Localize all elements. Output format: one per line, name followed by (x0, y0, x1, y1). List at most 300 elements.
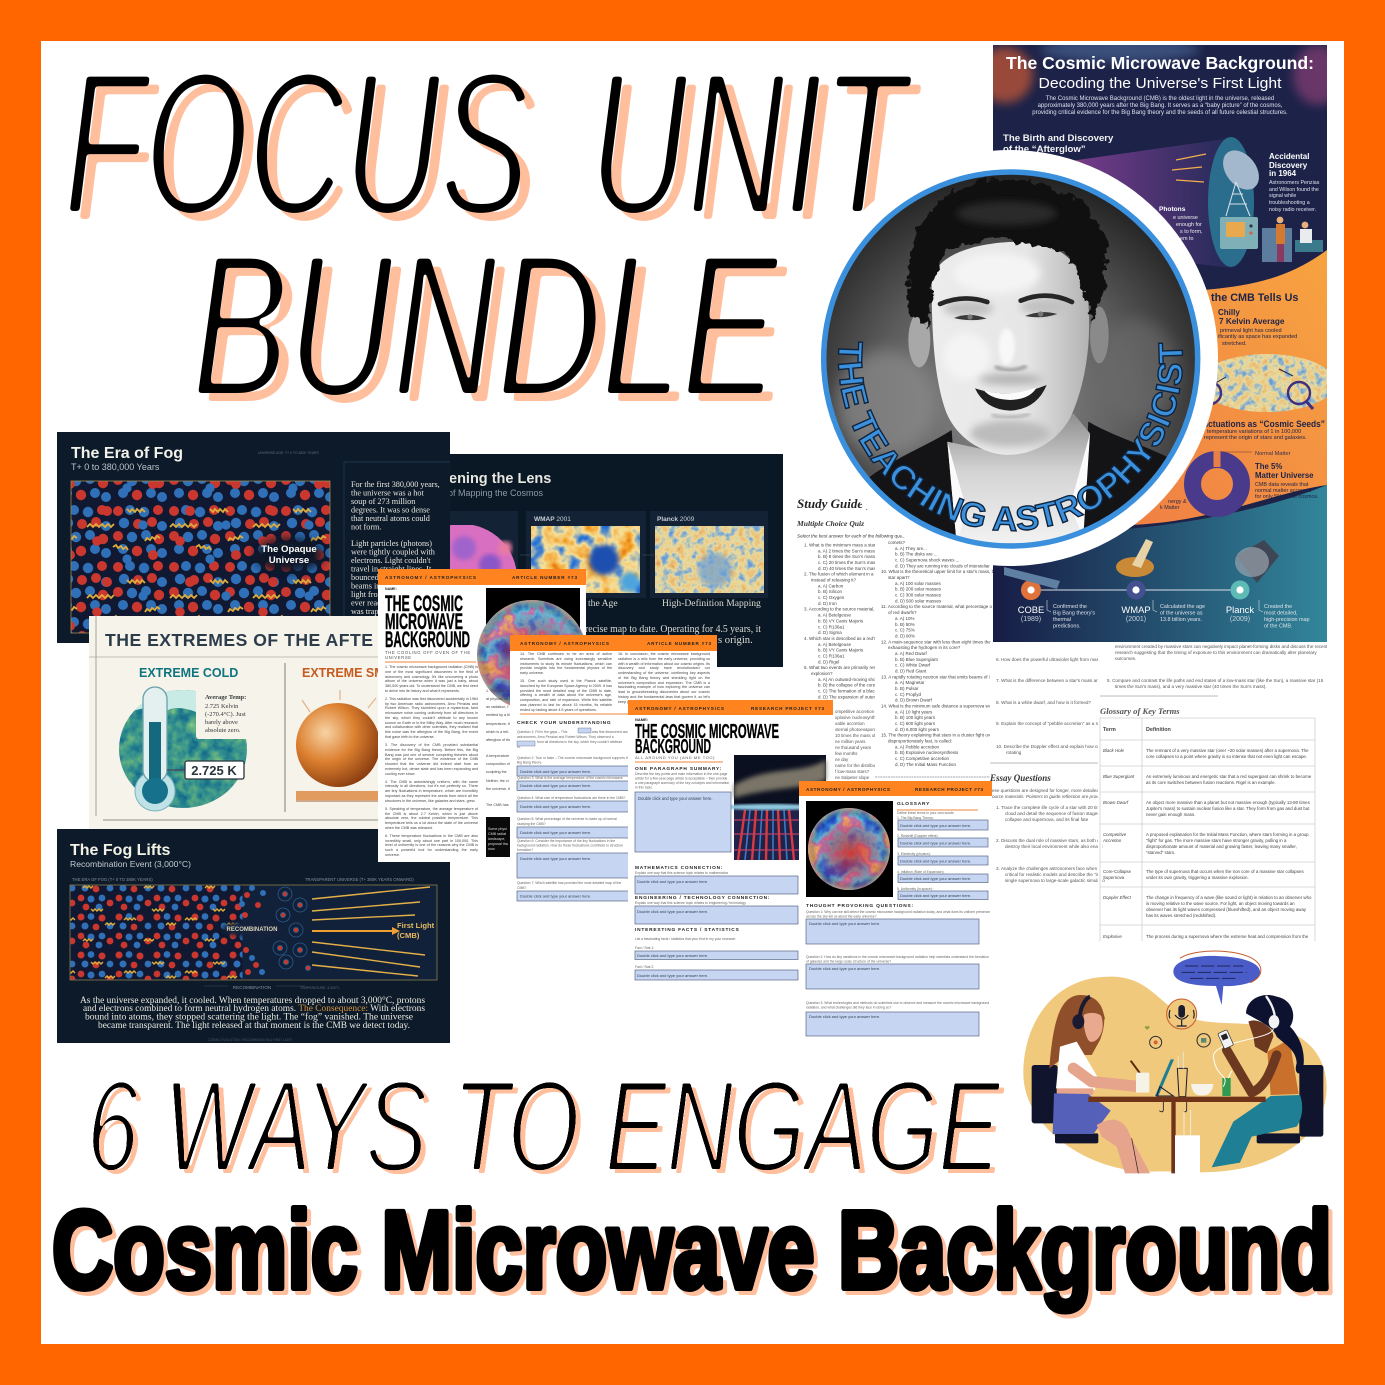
teal timeline band (993, 485, 1327, 642)
poster title: The Cosmic Microwave Background (CMB) is the oldest light in the universe, released (1046, 96, 1274, 102)
panel: Sharpening the Lens slide: of Mapping the Cosmos (450, 488, 544, 498)
table (1088, 1097, 1266, 1173)
diagram: recombination: First Light (397, 921, 435, 930)
quiz column two: 11. According to the source material, what percentage o (881, 604, 992, 609)
panel: research project page one: Double click and type your answer here. (637, 953, 708, 958)
essay and short answer text: 9. Explain the concept of “pebble accretion” as a n (996, 721, 1099, 726)
what the CMB tells us text: stretched. (1222, 341, 1247, 347)
heading: THE COSMIC (385, 591, 463, 616)
text block: fog lifts explanation: As the universe expanded, it cooled. When temperatures dropped to about 3,000°C, protons (80, 995, 425, 1006)
what the CMB tells us text: 7 Kelvin Average (1219, 317, 1285, 326)
badge lettering: THE TEACHING ASTROPHYSICIST (838, 341, 1184, 532)
quiz column two: d. D) 6,000 light years (895, 727, 940, 732)
text block: era of fog explanation: soup of 273 million (351, 497, 415, 506)
panel: research project page two: Double click and type your answer here. (900, 858, 971, 864)
quiz column two: comets? (888, 540, 906, 545)
quiz column two: a. A) They are... (895, 546, 927, 551)
callout: dark fact box: proposal tha (488, 842, 508, 846)
map: CMB seeds with magnifiers (1212, 354, 1327, 412)
quiz column two: c. C) White Dwarf (895, 663, 931, 668)
section labels: ENGINEERING / TECHNOLOGY CONNECTION: (635, 895, 770, 901)
article side column: emitted by a bl (486, 713, 510, 717)
text block: era of fog explanation: travel in straight lines. It (351, 564, 432, 574)
quiz column one: 1. What is the minimum mass a star (804, 542, 876, 548)
image: galaxy and grid (720, 755, 826, 860)
panel: Study Guide quiz: few months (835, 751, 858, 756)
panel: Study Guide quiz: xternal photoevaporat (835, 727, 878, 732)
timeline: COBE WMAP Planck missions: Calculated the age (1160, 604, 1205, 610)
heading (635, 721, 779, 758)
article text: 2. This radiation was first discovered accidentally in 1964 by two American radio astronomers, Arno Penzias and Robert Wilson. They stumbled upon a mysterious, faint microwave noise coming uniformly from all directions in the sky, which they couldn't attribute to any known source on Earth or in the Milky Way. After much research and collaboration with other scientists, they realized that this noise was the afterglow of the Big Bang, the event that gave birth to the universe. (385, 697, 478, 739)
glossary boxes: 2. Redshift (Doppler effect): (897, 834, 938, 838)
quiz column one: a. A) 2 times the Sun's mass (818, 548, 876, 553)
panel: research project page one: Double click and type your answer here. (637, 879, 708, 884)
questions: Question 1: Fill in the gaps – This (517, 730, 568, 734)
text block: accidental discovery: and Wilson found the (1269, 187, 1319, 193)
glossary table: under its own gravity, triggering a massive explosion. (1146, 875, 1249, 880)
heading: BACKGROUND (635, 736, 711, 758)
article side column: The CMB has (486, 803, 509, 807)
essay and short answer text: ource materials. Pointers to guide reflection are provid (992, 794, 1102, 799)
text block: era of fog explanation: was trapped. (351, 607, 392, 616)
title: Focus Unit Bundle: FOCUS (74, 41, 539, 266)
image: opaque universe particles: Universe (269, 555, 309, 566)
quiz column one: a. A) Carbon (818, 583, 844, 588)
panel: research project page two: GLOSSARY (897, 801, 930, 807)
text block: average temp: Average Temp: (205, 694, 246, 701)
quiz column one: d. D) 40 times the Sun's mass (818, 566, 879, 571)
panel: The Extremes of the Afterglow slide: THE EXTREMES OF THE AFTE (105, 630, 373, 650)
questions: astronomers, Arno Penzias and Robert Wilson. They observed a (517, 735, 614, 739)
quiz column two: b. B) Blue Supergiant (895, 657, 939, 662)
glossary table: is moving relative to the wave source. For light, an object moving towards an (1146, 901, 1295, 906)
timeline: COBE WMAP Planck missions: Planck (1226, 604, 1254, 615)
thought provoking questions: Double click and type your answer here. (809, 966, 880, 971)
quiz column one: 5. What two events are primarily res (804, 665, 877, 670)
thought provoking questions: across the sky tell us about the early universe? (806, 914, 877, 918)
glossary table: Black Hole (1103, 748, 1125, 753)
thought provoking questions: Double click and type your answer here. (809, 1014, 880, 1019)
essay and short answer text: 10. Describe the Doppler effect and explain how col (996, 744, 1101, 749)
quiz column one: b. B) the collapse of the core (818, 683, 876, 688)
quiz column two: a. A) Magnetar (895, 680, 925, 685)
essay and short answer text: collapse and supernova, and its final fate (1005, 817, 1089, 822)
quiz column two: a. A) 100 solar masses (895, 581, 942, 586)
map: COBE (407, 511, 518, 632)
panel: article page one: NAME: (385, 587, 397, 591)
panel: Sharpening the Lens slide (450, 454, 783, 667)
text block: average temp (205, 694, 246, 734)
thought provoking questions: Question 1: Why can we still detect the cosmic microwave background radiation today, and what does its uniform presence (806, 910, 990, 914)
questions: CMB? (517, 886, 527, 890)
callout: dark fact box: landscape, (488, 837, 505, 841)
essay and short answer text: single supernova to large-scale galactic simulatio (1005, 878, 1105, 883)
glossary table: Accretion (1102, 838, 1122, 843)
glossary table: “starved” stars. (1146, 850, 1175, 855)
quiz column one: 3. According to the source material, (804, 607, 875, 612)
poster title (1006, 53, 1314, 116)
panel: Study Guide quiz (796, 496, 993, 786)
image: rainbow cosmic sphere (477, 588, 587, 710)
panel: CMB infographic poster: Photons (1159, 206, 1186, 213)
chart: matter donut: k Matter (1160, 505, 1180, 511)
diagram: recombination: RECOMBINATION (227, 927, 277, 933)
panel: research project page two: Double click and type your answer here. (900, 840, 971, 846)
panel: research project page one: ALL AROUND YOU (AND ME TOO) (635, 755, 715, 760)
panel: research project page two: Define these terms in your own words (897, 811, 954, 815)
what the CMB tells us text: primeval light has cooled (1220, 328, 1282, 334)
article side column: Neither, the cl (486, 779, 509, 783)
panel: research project page one: NAME: (635, 717, 648, 722)
glossary table: A proposed explanation for the Initial Mass Function, where stars forming in a group (1146, 832, 1309, 837)
quiz column two: of red dwarfs? (888, 610, 917, 615)
text block: era of fog explanation: bounced around like (351, 573, 418, 582)
text block: era of fog explanation (351, 480, 440, 616)
panel: research project page two: Double click and type your answer here. (900, 893, 971, 898)
panel: article page two: CHECK YOUR UNDERSTANDING (517, 720, 611, 726)
timeline: COBE WMAP Planck missions: (2009) (1230, 616, 1250, 623)
quiz column one: d. D) Iron (818, 601, 837, 606)
panel: article page one: ARTICLE NUMBER #73 (512, 575, 577, 580)
quiz column one: a. A) An outward-moving shc (818, 677, 876, 682)
timeline: COBE WMAP Planck missions: (2001) (1126, 616, 1146, 623)
questions: to. (517, 745, 521, 749)
timeline: COBE WMAP Planck missions: 13.8 billion years. (1160, 617, 1202, 623)
text block: era of fog explanation: that neutral atoms could (351, 514, 430, 523)
answer boxes (635, 792, 798, 980)
questions: Question 6: Consider the importance of the tiny fluctuations in the (517, 839, 615, 843)
text block: essay continuation: 5. Compare and contrast the life paths and end states of a low-mass star (like the Sun), a massive star (15 (1107, 678, 1324, 683)
thought provoking questions: radiation, and what challenges did they face in doing so? (806, 1006, 891, 1010)
text block: accidental discovery: troubleshooting a (1269, 200, 1310, 206)
panel: The Fog Lifts slide (57, 829, 450, 1043)
map: Planck: Planck 2009 (657, 516, 695, 523)
quiz column one: d. D) Rigel (818, 659, 839, 664)
article text columns: 14. The CMB continues to be an area of active research. Scientists are using increasingly sensitive instruments to study its minute fluctuations, which can provide insights into the fundamental physics of the early universe. (520, 652, 612, 675)
article side column: sculpting the (486, 770, 507, 774)
captions: High-Definition Mapping (662, 598, 761, 609)
quiz column two: a. A) Red Dwarf (895, 651, 928, 656)
panel: article page two: Double click and type your answer here. (520, 830, 591, 835)
panel: CMB infographic poster: s to form, (1180, 229, 1203, 235)
quiz column one: c. C) 20 times the Sun's mass (818, 560, 878, 565)
glossary table: Jupiter's mass) to sustain nuclear fusion like a star. They form from gas and dust but (1146, 806, 1310, 811)
questions: formation? (517, 848, 533, 852)
quiz column two: d. D) 500 solar masses (895, 598, 942, 603)
questions: from all directions in the sky, which they couldn't attribute (537, 740, 622, 744)
quiz column two: d. D) Brown Dwarf (895, 698, 933, 703)
timeline: COBE WMAP Planck missions: of the CMB. (1264, 624, 1292, 630)
quiz column two: 14. What is the minimum safe distance a supernova wo (881, 704, 992, 709)
text block: essay continuation (1107, 644, 1328, 689)
chart: matter donut: Normal Matter (1255, 451, 1291, 457)
text block: essay continuation: research suggesting that the timing of exposure to this environment can dramatically alter planetary (1115, 650, 1317, 655)
quiz column one: 2. The fusion of which element in a st (804, 572, 879, 577)
panel: CMB infographic poster: e universe (1173, 215, 1198, 221)
panel: Study Guide quiz: xplosive nucleosynthe (835, 715, 879, 720)
text block: accidental discovery: in 1964 (1269, 169, 1297, 178)
quiz column two: d. D) Red Giant (895, 668, 927, 673)
quiz column two: c. C) Supernova shock waves ... (895, 558, 960, 563)
panel: article page one: THE COOLING OFF OVEN OF THE (385, 650, 471, 655)
panel: The Fog Lifts slide: RECOMBINATION (233, 985, 271, 990)
essay and short answer text: 3. Analyze the challenges astronomers face when (996, 866, 1098, 871)
quiz column one: c. C) R136a1 (818, 653, 845, 658)
glossary table: Term (1103, 727, 1116, 733)
text block: fog lifts explanation: bound into atoms, they stopped scattering the light. The “fog” vanished. The universe (85, 1012, 413, 1022)
panel: essay questions and glossary page: Glossary of Key Terms (1100, 706, 1180, 716)
heading: BACKGROUND (385, 627, 470, 652)
panel: article page two: Double click and type your answer here. (520, 769, 591, 774)
section labels: INTERESTING FACTS / STATISTICS (635, 927, 740, 933)
glossary table: core collapses to a point where gravity is so intense that not even light can escape. (1146, 754, 1307, 759)
character: left listener (1032, 995, 1150, 1173)
what the CMB tells us text: Chilly (1218, 308, 1240, 317)
panel: article page one: ASTRONOMY / ASTROPHYSICS (385, 575, 476, 580)
quiz column two: b. B) Pulsar (895, 686, 919, 691)
glossary table: Core-Collapse (1103, 869, 1132, 874)
what the CMB tells us text: ificantly as space has expanded (1218, 334, 1297, 340)
title: Focus Unit Bundle (64, 41, 923, 421)
essay and short answer text: 8. What is a white dwarf, and how is it formed? (996, 700, 1091, 705)
timeline: COBE WMAP Planck missions: Big Bang theory's (1053, 610, 1095, 616)
quiz column one: instead of releasing it? (811, 578, 857, 583)
glossary boxes: 5. Uniformity (in space): (897, 887, 933, 891)
panel: research project page two: RESEARCH PROJECT #73 (915, 787, 983, 792)
panel: The Fog Lifts slide: Recombination Event (3,000°C) (70, 859, 191, 869)
text block: accidental discovery (1269, 152, 1320, 213)
glossary table: An extremely luminous and energetic star that a red supergiant can shrink to become (1146, 774, 1312, 779)
map: WMAP: WMAP 2001 (534, 516, 571, 523)
panel: Study Guide quiz: Study Guide , (797, 496, 870, 511)
section labels: MATHEMATICS CONNECTION: (635, 865, 723, 871)
quiz column one: c. C) R136a1 (818, 624, 845, 629)
essay and short answer text: 1. Trace the complete life cycle of a star with 20 tim (996, 805, 1100, 810)
panel: CMB infographic poster (993, 45, 1327, 642)
panel: research project page one: Double click and type your answer here. (637, 909, 708, 914)
text block: era of fog explanation: beams in a dense fog. No (351, 582, 434, 590)
panel: research project page one: in this topic. (635, 786, 653, 790)
glossary table (1100, 718, 1315, 942)
panel: Study Guide quiz: ne Salpeter slope (835, 775, 870, 780)
tabletop: cup, tablet, bowl and can (1131, 1052, 1232, 1097)
text block: average temp: barely above (205, 719, 238, 726)
quiz column one: b. B) VY Canis Majoris (818, 618, 864, 623)
what the CMB tells us text: the CMB Tells Us (1211, 292, 1298, 304)
text block: era of fog explanation: were tightly coupled with (351, 548, 435, 556)
quiz column two: c. C) Competitive accretion (895, 756, 950, 761)
diagram: recombination: (CMB) (397, 931, 420, 940)
speech bubble (1173, 951, 1261, 1005)
panel: The Fog Lifts slide: TEMPERATURE: 3,000°C (300, 986, 340, 990)
text block: fog lifts explanation: became transparent. The light released at that moment is the CMB we detect today. (98, 1020, 410, 1031)
text block: average temp: (-270.4°C). Just (205, 711, 246, 718)
glossary table: Brown Dwarf (1103, 800, 1129, 805)
panel: research project page two: ASTRONOMY / ASTROPHYSICS (806, 787, 890, 792)
quiz column one: d. D) The expansion of outer (818, 694, 875, 699)
captions (585, 598, 761, 646)
text block: accidental discovery: signal while (1269, 193, 1296, 199)
callout: 2.725 K (167, 761, 244, 779)
answer boxes (517, 766, 637, 901)
questions: Question 2: True or false – The cosmic microwave background supports the (517, 756, 631, 760)
map: Planck (650, 511, 768, 598)
quiz column one: 4. Which star is described as a red? (804, 636, 876, 641)
orange band (1090, 250, 1327, 525)
captions: the Age (588, 598, 618, 609)
quiz column two: a. A) 10 light years (895, 709, 933, 714)
panel: article page two: Double click and type your answer here. (520, 783, 591, 788)
timeline: COBE WMAP Planck missions: COBE (1018, 604, 1044, 615)
panel: Sharpening the Lens slide: ening the Lens (450, 471, 551, 487)
text block: era of fog explanation: electrons. Light couldn't (351, 556, 431, 565)
quiz column one: a. A) Betelgeuse (818, 642, 852, 647)
panel: research project page one: Double click and type your answer here. (637, 973, 708, 978)
quiz column two: 12. A main-sequence star with less than eight times the (881, 639, 991, 644)
panel: essay questions and glossary page (990, 642, 1327, 942)
essay and short answer text: Essay Questions (990, 773, 1051, 783)
quiz column two: a. A) 10% (895, 616, 915, 621)
glossary table: The change in frequency of a wave (like sound or light) in relation to an observer who (1146, 895, 1312, 900)
panel: article page two (510, 635, 717, 902)
glossary table: The remnant of a very massive star (over ~20 solar masses) after a supernova. The (1146, 748, 1309, 753)
quiz column two: d. D) They are running into clouds of interstellar (895, 563, 990, 568)
quiz column one: explosion? (811, 671, 833, 676)
section labels: List a fascinating facts / statistics that your find in my your research (635, 937, 736, 941)
panel: CMB infographic poster: em to (1180, 236, 1193, 242)
text block: accidental discovery: noisy radio receiver. (1269, 207, 1316, 213)
timeline: COBE WMAP Planck missions: thermal (1053, 617, 1071, 623)
icon: scientists at console (1262, 217, 1323, 262)
timeline: COBE WMAP Planck missions: most detailed, (1264, 610, 1298, 616)
chart: matter donut: CMB data reveals that (1255, 482, 1309, 488)
map: WMAP (526, 511, 646, 598)
panel: The Era of Fog slide: The Era of Fog (71, 445, 183, 462)
questions: Question 5: What percentage of the universe is made up of normal (517, 817, 617, 821)
questions: Question 4: What size of temperature fluctuations are there in the CMB? (517, 796, 625, 800)
quiz column two: b. B) 50% (895, 622, 915, 627)
panel: Study Guide quiz: ne day (835, 757, 849, 762)
panel: The Fog Lifts slide: The Fog Lifts (70, 842, 171, 859)
quiz column two: disproportionately fast, is called: (888, 739, 952, 744)
quiz column two: d. D) 90% (895, 633, 915, 638)
essay and short answer text: ese questions are designed for longer, more detailed (992, 788, 1099, 793)
essay and short answer text: 6. How does the powerful ultraviolet light from mas (996, 657, 1100, 662)
captions: s origin. (718, 635, 753, 646)
timeline: COBE WMAP Planck missions: high-precision map (1264, 617, 1310, 623)
questions: Question 7: Which satellite has provided the most detailed map of the (517, 881, 621, 885)
panel: Study Guide quiz: f low-mass stars? (835, 769, 870, 774)
chart: matter donut: The 5% (1255, 462, 1282, 471)
panel: research project page two: Double click and type your answer here. (900, 823, 971, 828)
timeline: COBE WMAP Planck missions: predictions. (1053, 624, 1081, 630)
glossary boxes: 3. Electricity (physics): (897, 852, 931, 856)
article side column: an radiation, f (486, 705, 508, 709)
text block: era of fog explanation: For the first 380,000 years, (351, 480, 440, 489)
quiz column two: b. B) 200 solar masses (895, 587, 942, 592)
glossary table: Explosive (1103, 934, 1122, 939)
panel: The Extremes of the Afterglow slide: EXTREME COLD (139, 666, 238, 680)
thought provoking questions: Double click and type your answer here. (809, 921, 880, 926)
callout: 2.725 K: 2.725 K (191, 763, 237, 778)
questions: Big Bang theory. (517, 760, 542, 764)
poster title: Decoding the Universe's First Light (1038, 75, 1282, 92)
panel: research project page one: Double click and type your answer here. (638, 796, 712, 801)
section labels: Fact / Stat 1: (635, 946, 654, 950)
quiz column one: b. B) Silicon (818, 589, 843, 594)
panel: research project page one: ONE PARAGRAPH SUMMARY: (635, 766, 722, 772)
glossary table: never gain enough mass. (1146, 812, 1195, 817)
icons: reaction badges (1145, 1026, 1210, 1048)
text block: era of fog explanation: light from this era could (351, 590, 430, 599)
timeline: COBE WMAP Planck missions: Confirmed the (1053, 604, 1087, 610)
quiz column two: exhausting the hydrogen in its core? (888, 645, 961, 650)
panel: CMB infographic poster: temperature variations of 1 in 100,000 (1207, 429, 1301, 435)
quiz column one: c. C) Oxygen (818, 595, 845, 600)
quiz column two: c. C) 300 solar masses (895, 593, 942, 598)
panel: article page two: ARTICLE NUMBER #73 (647, 641, 711, 646)
panel: article page two: Double click and type your answer here. (520, 894, 591, 898)
chart: matter donut: for only 5% of the cosmos. (1255, 494, 1319, 500)
essay and short answer text (989, 657, 1105, 883)
questions: was first discovered accidentally by two (592, 730, 651, 734)
photo: portrait (820, 170, 1205, 555)
quiz column two: 15. The theory explaining that stars in a cluster fight ove (881, 733, 993, 738)
chart: matter donut: nergy & (1168, 499, 1187, 505)
quiz column two: b. B) 100 light years (895, 715, 936, 720)
glossary table: as its core switches between fusion reactions. Rigel is an example. (1146, 780, 1276, 785)
panel: CMB infographic poster: The Birth and Discovery (1003, 133, 1114, 144)
poster title: The Cosmic Microwave Background: (1006, 53, 1314, 73)
captions: recise map to date. Operating for 4.5 years, it (585, 624, 761, 635)
section labels (635, 865, 770, 969)
article side column: A temperature (486, 754, 509, 758)
image: opaque universe particles (71, 481, 330, 633)
panel: research project page one: ASTRONOMY / ASTROPHYSICS (635, 706, 724, 711)
panel: article page two: Double click and type your answer here. (520, 804, 591, 809)
timeline: COBE WMAP Planck missions: (1989) (1021, 616, 1041, 623)
glossary boxes: 4. Inflation (Rate of Expansion): (897, 870, 945, 874)
thought provoking questions (806, 903, 990, 1036)
panel: Study Guide quiz: ne million years (835, 739, 866, 744)
panel: The Extremes of the Afterglow slide: EXTREME SM (302, 666, 384, 680)
essay and short answer text: 7. What is the difference between a star's mass an (996, 678, 1099, 683)
panel: article page two: Double click and type your answer here. (520, 856, 591, 861)
glossary table: The process during a supernova where the extreme heat and compression from the (1146, 934, 1309, 939)
panel: research project page one: article for a five-year page article is acceptable – then provide (635, 776, 727, 780)
thought provoking questions: Question 2: How do tiny variations in the cosmic microwave background radiation help scientists understand the formation (806, 955, 989, 959)
glossary table: observer has its light waves compressed (blueshifted), and an object moving away (1146, 907, 1307, 912)
quiz column one: b. B) VY Canis Majoris (818, 648, 864, 653)
panel: Study Guide quiz: xable accretion (835, 721, 865, 726)
panel: The Era of Fog slide (57, 432, 450, 643)
timeline: COBE WMAP Planck missions: of the universe as (1160, 610, 1203, 616)
text block: era of fog explanation: Light particles (photons) (351, 539, 432, 548)
text block: era of fog explanation: degrees. It was so dense (351, 506, 430, 514)
quiz column two: a. A) Pebble accretion (895, 744, 940, 749)
quiz column two: c. C) 75% (895, 628, 915, 633)
glossary boxes: 1. The Big Bang Theory: (897, 816, 934, 820)
quiz column two: b. B) The disks are ... (895, 552, 938, 557)
panel: Study Guide quiz: Select the best answer for each of the following questions. (797, 534, 916, 538)
text block: accidental discovery: Discovery (1269, 161, 1308, 170)
glossary table: has its waves stretched (redshifted). (1146, 913, 1216, 918)
panel: The Fog Lifts slide: THE ERA OF FOG (T+ 0 TO 380K YEARS) (72, 877, 153, 882)
icon: small hot sphere (296, 690, 384, 801)
text block: era of fog explanation: the universe was a hot (351, 488, 424, 498)
icon: microphone badge (1167, 999, 1197, 1029)
image: opaque universe particles: The Opaque (261, 544, 317, 555)
